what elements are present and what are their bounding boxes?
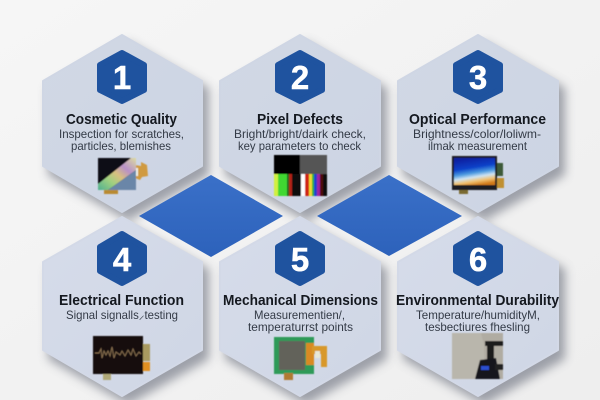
heading: cosmetic quality: Cosmetic Quality (66, 111, 178, 128)
panel: pixel defects (220, 35, 387, 221)
image: circuit board (274, 337, 327, 380)
badge: number 4 (100, 234, 144, 283)
badge: number 6: 6 (469, 241, 487, 278)
description: optical performance: ilmak measurement (428, 139, 528, 153)
image: test chamber (452, 333, 503, 379)
description: mechanical dimensions: Measurementien/, (254, 308, 345, 322)
description: environmental durability: tesbectiures fhesling (425, 320, 530, 334)
panel: mechanical dimensions (220, 217, 387, 400)
panel: cosmetic quality (43, 35, 209, 221)
description: cosmetic quality: particles, blemishes (71, 139, 171, 153)
description: optical performance: Brightness/color/loliwm- (413, 127, 541, 141)
badge: number 2 (278, 53, 322, 101)
description: electrical function: Signal signalls⸝testing (66, 308, 178, 322)
heading: pixel defects: Pixel Defects (257, 111, 343, 128)
diamond: right connector (317, 175, 462, 256)
heading: optical performance: Optical Performance (409, 111, 546, 128)
description: pixel defects: Bright/bright/dairk check, (234, 127, 366, 141)
badge: number 5 (278, 234, 322, 283)
description: environmental durability: Temperature/humidityM, (416, 308, 540, 322)
heading: mechanical dimensions: Mechanical Dimensions (223, 292, 378, 309)
badge: number 3: 3 (469, 59, 487, 96)
badge: number 6 (456, 234, 500, 283)
description: optical performance (413, 127, 541, 153)
panel: electrical function (43, 217, 209, 400)
badge: number 5: 5 (291, 241, 309, 278)
description: pixel defects: key parameters to check (238, 139, 362, 153)
image: colour gradient panel (452, 156, 504, 194)
badge: number 1 (100, 53, 144, 101)
panel: environmental durability (396, 217, 565, 400)
description: cosmetic quality (59, 127, 184, 153)
description: mechanical dimensions (248, 308, 353, 334)
heading: environmental durability: Environmental Durability (396, 292, 560, 309)
image: test patterns (274, 155, 327, 196)
image: scratched panel (98, 158, 148, 194)
badge: number 1: 1 (113, 59, 131, 96)
description: pixel defects (234, 127, 366, 153)
description: mechanical dimensions: temperaturrst points (248, 320, 353, 334)
image: oscilloscope panel (93, 336, 150, 380)
diamond: left connector (139, 175, 283, 257)
heading: electrical function: Electrical Function (59, 292, 184, 309)
description: cosmetic quality: Inspection for scratches, (59, 127, 184, 141)
panel: optical performance (398, 35, 565, 221)
badge: number 3 (456, 53, 500, 101)
description: environmental durability (416, 308, 540, 334)
badge: number 4: 4 (113, 241, 132, 278)
badge: number 2: 2 (291, 59, 309, 96)
